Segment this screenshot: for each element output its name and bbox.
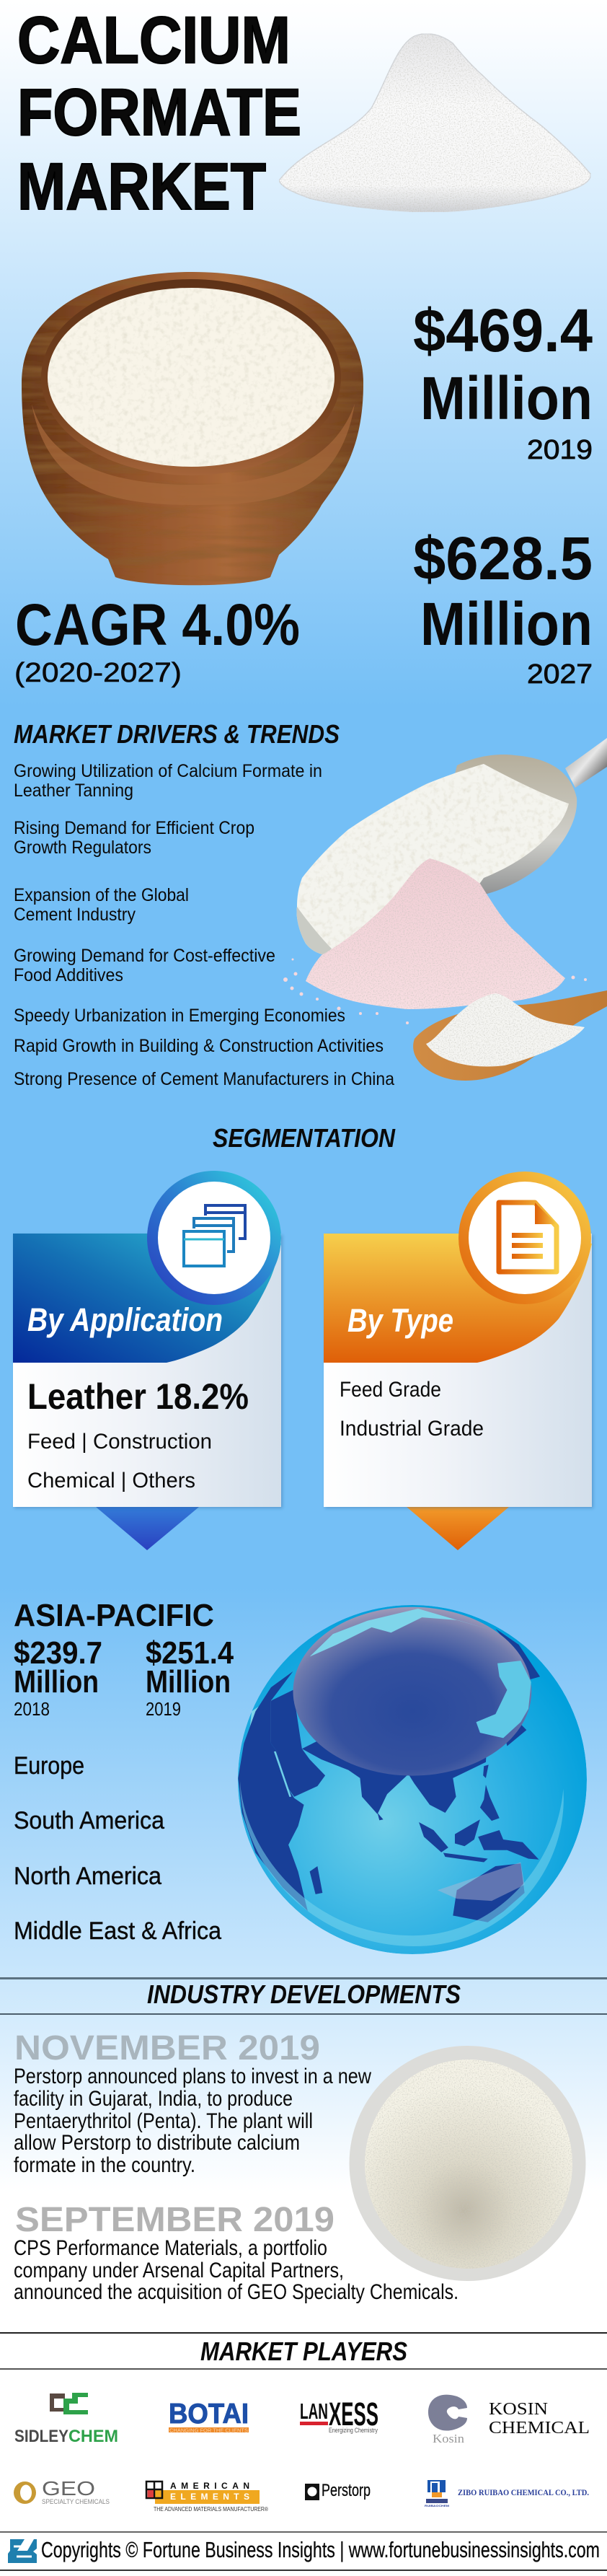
list: other regions: Middle East & Africa [14,1917,221,1945]
logo: sidleychem: CHEM [68,2427,118,2446]
stat: 2019 market size: $469.4 [413,296,593,364]
logo: lanxess: XESS [329,2396,378,2432]
logo: lanxess: Energizing Chemistry [329,2427,378,2434]
title: FORMATE [17,76,301,149]
list: market drivers: Cement Industry [14,905,136,925]
logo: lanxess: LAN [300,2399,328,2424]
stat: asia-pacific 2019 [146,1635,234,1720]
stat: 2019 market size [413,296,593,465]
logo: geo specialty chemicals: GEO [42,2477,95,2500]
development: september 2019: CPS Performance Materials, a portfolio [14,2236,327,2260]
panel: by type [324,1171,592,1550]
stat: CAGR: (2020-2027) [14,658,182,688]
arrow: application pointer [96,1507,199,1550]
list: market drivers: Rising Demand for Efficient Crop [14,818,254,838]
list: other regions: North America [14,1863,161,1890]
logo: botai: BOTAI [169,2399,249,2430]
development: november 2019 [14,2029,371,2177]
development: november 2019: NOVEMBER 2019 [14,2029,320,2067]
stat: asia-pacific 2018: $239.7 [14,1635,102,1671]
text: application segments [27,1430,212,1493]
divider band: industry developments top rule [0,1977,607,1979]
divider band: industry developments bottom rule [0,2013,607,2015]
stat: 2027 market size: Million [420,590,593,658]
stat: 2027 market size: 2027 [527,659,593,690]
heading: market players: MARKET PLAYERS [200,2337,407,2366]
logo: sidleychem: SIDLEY [14,2427,68,2446]
text: type segments: Industrial Grade [340,1417,484,1441]
list: other regions [14,1752,221,1945]
stat: asia-pacific 2018 [14,1635,102,1720]
image: scoop, pink pile and spoon of powder [283,738,607,1081]
development: november 2019: allow Perstorp to distribute calcium [14,2131,300,2155]
logo: american elements [146,2481,268,2513]
list: market drivers: Strong Presence of Cement Manufacturers in China [14,1069,394,1089]
stat: CAGR [14,592,300,688]
development: september 2019: SEPTEMBER 2019 [15,2201,334,2239]
text: type segments: Feed Grade [340,1378,441,1402]
logo: american elements: AMERICAN [170,2481,249,2491]
list: market drivers: Leather Tanning [14,781,133,801]
list: market drivers: Expansion of the Global [14,885,189,905]
list: other regions: Europe [14,1752,84,1780]
development: september 2019 [14,2201,458,2304]
arrow: type pointer [407,1507,509,1550]
title [17,4,301,224]
icon: globe [238,1605,587,1954]
logo: kosin chemical: KOSIN [489,2400,548,2419]
logo: lanxess [300,2396,378,2434]
logo: sidleychem [14,2393,118,2446]
stat: asia-pacific 2019: 2019 [146,1698,181,1720]
title: MARKET [17,150,266,224]
list: market drivers: Growing Demand for Cost-effective [14,946,275,966]
stat: asia-pacific 2018: 2018 [14,1698,50,1720]
logo: kosin chemical [428,2395,590,2445]
list: market drivers: Food Additives [14,965,123,985]
stat: 2027 market size [413,524,593,690]
icon: document [499,1203,557,1272]
development: november 2019: formate in the country. [14,2153,195,2177]
heading: asia-pacific: ASIA-PACIFIC [14,1598,214,1633]
list: market drivers: Speedy Urbanization in Emerging Economies [14,1006,345,1026]
text: application segments: Feed | Construction [27,1430,212,1454]
logo: american elements: THE ADVANCED MATERIALS MANUFACTURER® [154,2506,268,2513]
stat: asia-pacific 2018: Million [14,1664,99,1700]
list: other regions: South America [14,1807,164,1834]
stat: asia-pacific 2019: Million [146,1664,231,1700]
list: market drivers: Growth Regulators [14,838,151,858]
logo: zibo ruibao chemical [425,2480,589,2507]
icon: fortune business insights logo [8,2539,37,2563]
logo: kosin chemical: Kosin [433,2432,465,2445]
title: CALCIUM [17,4,291,77]
logo: botai: CHANGING FOR THE CLIENTS [169,2428,248,2434]
label: by type: By Type [347,1302,453,1339]
logo: zibo ruibao chemical: RUIBAOCHEM [425,2504,450,2507]
logo: american elements: ELEMENTS [170,2492,249,2502]
list: market drivers: Growing Utilization of Calcium Formate in [14,761,322,781]
image: dish of white powder [349,2046,585,2281]
logo: zibo ruibao chemical: ZIBO RUIBAO CHEMICAL CO., LTD. [458,2489,589,2497]
stat: 2019 market size: 2019 [527,435,593,465]
logo: perstorp: Perstorp [322,2481,371,2500]
stat: CAGR: CAGR 4.0% [15,592,300,658]
panel: by application [13,1171,281,1550]
list: market drivers: Rapid Growth in Building & Construction Activities [14,1036,384,1056]
text: application segments: Chemical | Others [27,1469,195,1493]
development: november 2019: Pentaerythritol (Penta). The plant will [14,2109,313,2133]
development: september 2019: company under Arsenal Capital Partners, [14,2259,344,2282]
development: september 2019: announced the acquisition of GEO Specialty Chemicals. [14,2280,458,2304]
stat: 2027 market size: $628.5 [413,524,593,592]
label: by application: By Application [27,1301,223,1338]
icon: browser windows [184,1205,245,1266]
text: type segments [340,1378,484,1441]
stat: leather share: Leather 18.2% [27,1376,249,1417]
development: november 2019: Perstorp announced plans to invest in a new [14,2065,371,2088]
stat: asia-pacific 2019: $251.4 [146,1635,234,1671]
logo: perstorp [305,2481,371,2500]
heading: industry developments: INDUSTRY DEVELOPMENTS [147,1979,461,2009]
logo: geo specialty chemicals: SPECIALTY CHEMICALS [42,2498,110,2505]
logo: geo specialty chemicals [14,2477,110,2505]
stat: 2019 market size: Million [420,364,593,432]
image: white powder pile [279,34,590,212]
heading: market drivers and trends: MARKET DRIVERS & TRENDS [14,719,340,749]
development: november 2019: facility in Gujarat, India, to produce [14,2087,293,2111]
image: wooden bowl with flour [22,272,363,585]
list: market drivers [14,761,394,1089]
logo: kosin chemical: CHEMICAL [489,2419,590,2437]
heading: segmentation: SEGMENTATION [213,1123,396,1153]
